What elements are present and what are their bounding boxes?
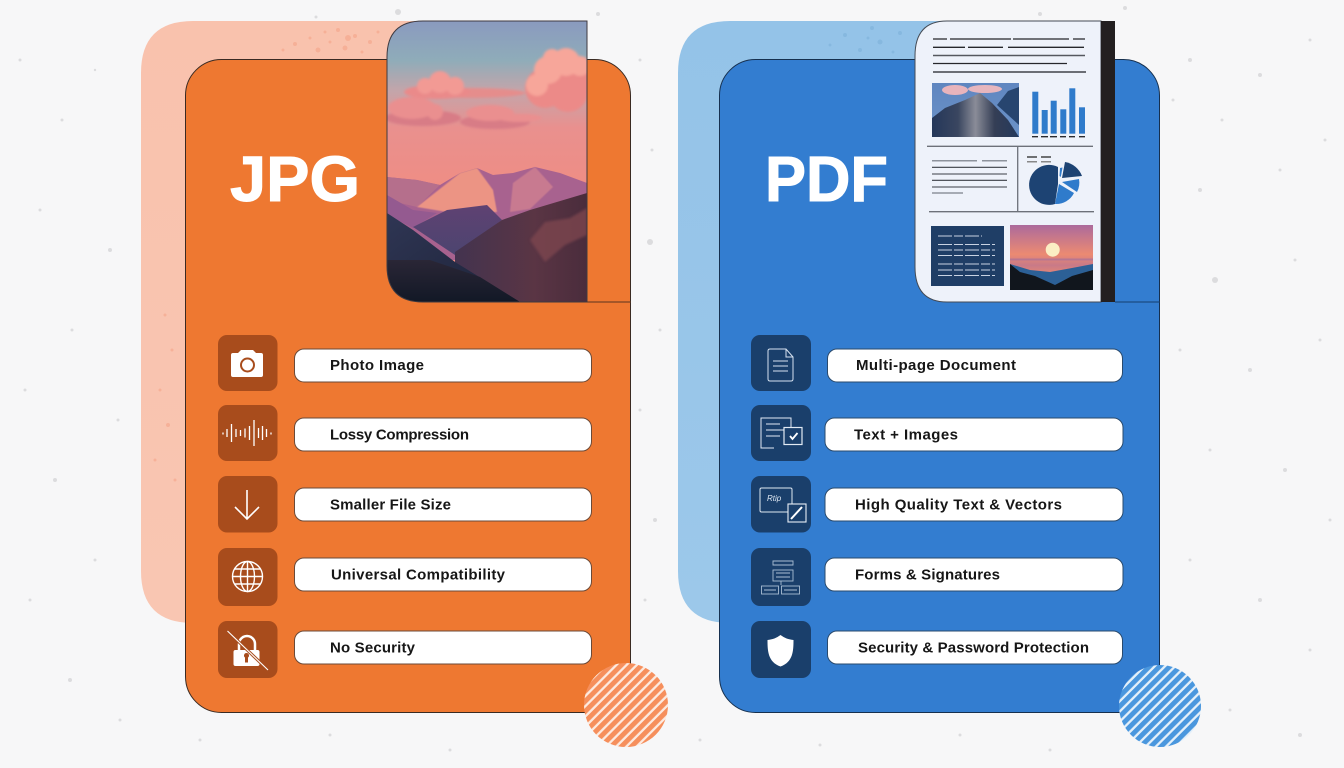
icon: vector pen: Rtip: [767, 494, 782, 503]
panel: JPG backing shape: [141, 21, 420, 623]
label pill: Universal Compatibility: Universal Compatibility: [331, 566, 506, 584]
label pill: Smaller File Size: [294, 488, 592, 521]
label pill: No Security: No Security: [330, 640, 416, 656]
icon: document page: [751, 335, 811, 391]
document header lines: [933, 39, 1086, 72]
label pill: Universal Compatibility: [294, 558, 592, 591]
photo outline: [387, 21, 587, 302]
label pill: Smaller File Size: Smaller File Size: [330, 496, 451, 514]
panel: PDF card: [720, 60, 1160, 712]
image: document preview: [915, 21, 1115, 302]
label pill: Lossy Compression: [294, 418, 592, 451]
icon: crossed-out padlock: [218, 621, 278, 678]
label pill: Forms & Signatures: [825, 558, 1123, 591]
label pill: Security & Password Protection: [828, 631, 1122, 664]
document mountain photo: [932, 83, 1019, 137]
label pill: Text + Images: Text + Images: [854, 426, 958, 444]
label pill: Forms & Signatures: Forms & Signatures: [855, 566, 1000, 584]
label pill: High Quality Text & Vectors: [825, 488, 1123, 521]
icon: sound wave: [218, 405, 278, 461]
label pill: Security & Password Protection: Security & Password Protection: [858, 640, 1089, 656]
document sunset image: [1010, 225, 1093, 290]
label pill: Multi-page Document: Multi-page Document: [856, 357, 1016, 374]
mid ridge: [413, 205, 502, 255]
decoration: PDF hatched circle: [1119, 665, 1201, 747]
label pill: Photo Image: [294, 349, 592, 382]
panel: PDF backing shape: [678, 21, 950, 623]
clouds: [385, 48, 594, 129]
document bar chart: [1032, 88, 1085, 137]
panel: JPG card: [186, 60, 631, 712]
icon: camera: [218, 335, 278, 391]
heading: PDF: PDF: [765, 143, 888, 215]
label pill: Lossy Compression: Lossy Compression: [330, 426, 469, 444]
decoration: JPG hatched circle: [584, 663, 668, 747]
label pill: Photo Image: Photo Image: [330, 357, 424, 374]
icon: down arrow: [218, 476, 278, 532]
label pill: Multi-page Document: [828, 349, 1122, 382]
far mountains: [387, 167, 587, 260]
label pill: High Quality Text & Vectors: High Quality Text & Vectors: [855, 496, 1062, 514]
document pie chart: [1029, 162, 1082, 205]
icon: shield: [751, 621, 811, 678]
icon: text and image: [751, 405, 811, 461]
image: mountain sunset photo: [385, 21, 594, 302]
document navy text box: [931, 226, 1004, 286]
icon: globe: [218, 548, 278, 606]
document text block: [932, 161, 1007, 193]
icon: vector pen: [751, 476, 811, 532]
heading: JPG: JPG: [230, 143, 360, 215]
label pill: No Security: [294, 631, 592, 664]
label pill: Text + Images: [825, 418, 1123, 451]
icon: form fields: [751, 548, 811, 606]
